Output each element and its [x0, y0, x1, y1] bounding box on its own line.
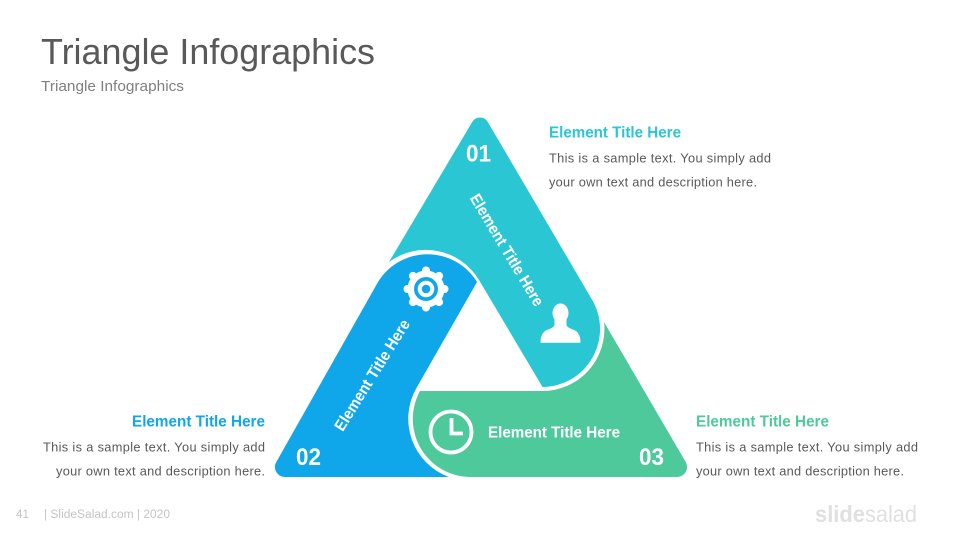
text block 03: This is a sample text. You simply add: [696, 440, 918, 454]
triangle diagram: [275, 117, 687, 477]
text block 01: [549, 124, 771, 190]
number 02: 02: [296, 444, 321, 471]
text block 02: your own text and description here.: [56, 464, 265, 478]
text block 01: This is a sample text. You simply add: [549, 150, 771, 166]
panel: green segment 03: [413, 322, 687, 477]
icon: clock: [430, 412, 472, 452]
text block 01: Element Title Here: [549, 124, 681, 142]
icon: gear: [408, 270, 444, 308]
subtitle: Triangle Infographics: [41, 78, 184, 95]
panel: blue segment 02: [275, 254, 477, 477]
number 01: 01: [466, 140, 491, 168]
logo: slidesalad: slide: [815, 501, 865, 527]
teal segment label: Element Title Here: [466, 191, 546, 310]
text block 02: Element Title Here: [132, 414, 265, 430]
text block 02: [43, 414, 265, 478]
blue segment label: Element Title Here: [332, 317, 414, 434]
icon: person: [540, 304, 580, 343]
footer: page number: 41: [16, 509, 29, 521]
number 03: 03: [639, 444, 664, 471]
logo: slidesalad: salad: [865, 501, 917, 527]
panel: teal segment 01: [389, 117, 600, 387]
text block 03: Element Title Here: [696, 414, 829, 430]
title: Triangle Infographics: [41, 31, 375, 72]
text block 03: your own text and description here.: [696, 464, 904, 478]
green segment label: Element Title Here: [488, 424, 620, 442]
text block 03: [696, 414, 918, 478]
footer: credit: | SlideSalad.com | 2020: [44, 509, 170, 521]
text block 02: This is a sample text. You simply add: [43, 440, 265, 454]
logo: slidesalad: [815, 501, 917, 527]
text block 01: your own text and description here.: [549, 174, 757, 190]
